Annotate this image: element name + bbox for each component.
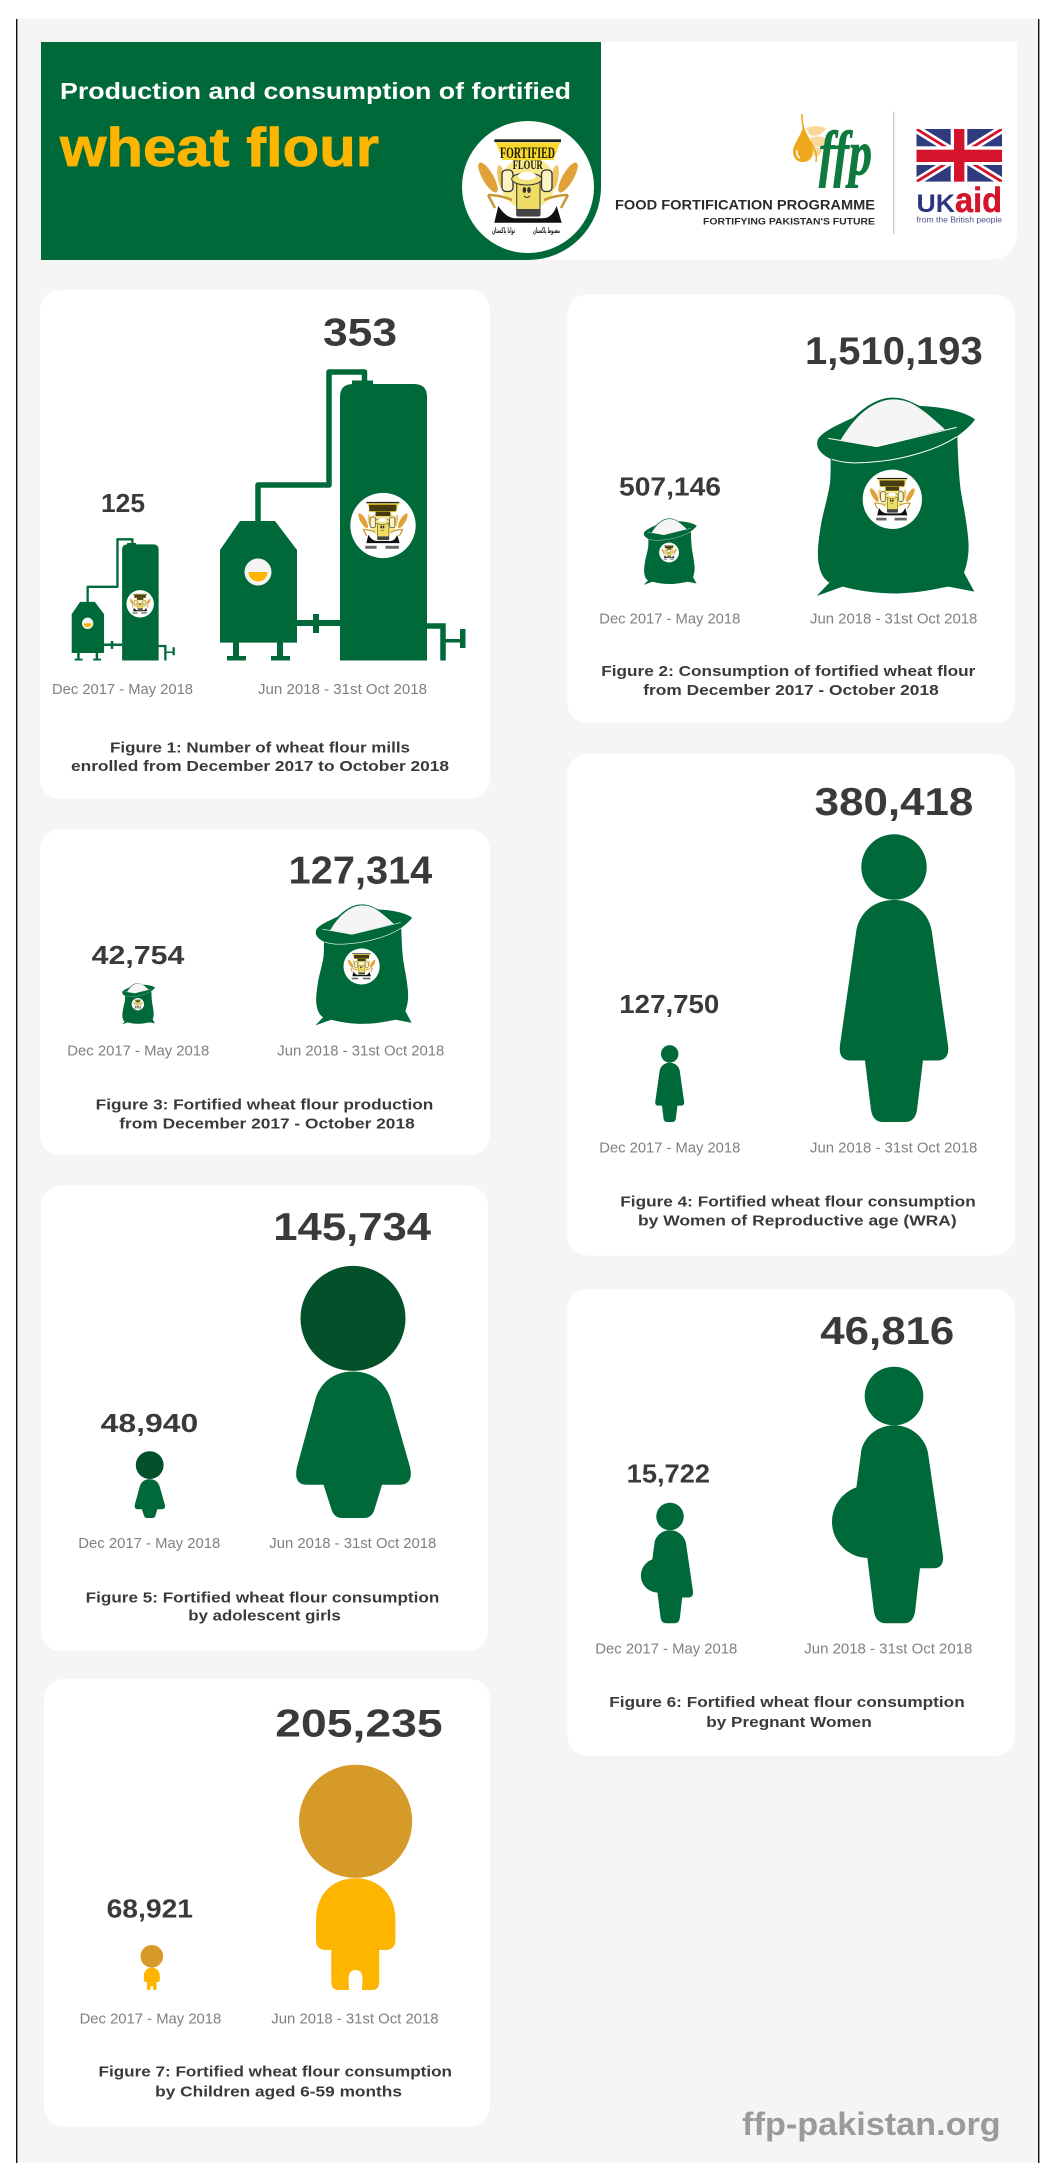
programme name: FOOD FORTIFICATION PROGRAMME xyxy=(615,197,875,212)
panel: figure 7 children xyxy=(44,1679,490,2127)
icon: small flour sack xyxy=(644,518,697,585)
value 68,921: 68,921 xyxy=(107,1894,193,1924)
icon: small flour sack xyxy=(122,983,155,1024)
period label right: Jun 2018 - 31st Oct 2018 xyxy=(258,682,427,698)
card xyxy=(567,1289,1015,1756)
period label right: Jun 2018 - 31st Oct 2018 xyxy=(277,1044,444,1060)
icon: union flag xyxy=(916,129,1002,182)
icon: fortified flour logo: توانا پاکستان xyxy=(492,226,515,235)
caption: by Children aged 6-59 months xyxy=(155,2084,402,2101)
UKaid wordmark xyxy=(916,181,1002,220)
period label left: Dec 2017 - May 2018 xyxy=(599,1140,740,1156)
card xyxy=(44,1679,490,2127)
panel: figure 2 consumption xyxy=(567,294,1015,723)
value 46,816: 46,816 xyxy=(820,1310,954,1353)
caption xyxy=(96,1097,433,1133)
card xyxy=(567,754,1015,1256)
icon: small mill xyxy=(72,539,175,660)
icon: small pregnant woman xyxy=(641,1503,693,1623)
UKaid wordmark: aid xyxy=(955,181,1002,220)
icon: small child xyxy=(140,1945,163,1990)
value 1,510,193: 1,510,193 xyxy=(805,330,983,373)
icon: small girl xyxy=(135,1451,165,1518)
caption: Figure 2: Consumption of fortified wheat flour xyxy=(601,663,975,680)
caption xyxy=(86,1589,439,1624)
icon: large woman xyxy=(840,834,948,1122)
value 48,940: 48,940 xyxy=(101,1408,198,1438)
header green block xyxy=(41,42,601,260)
caption: Figure 6: Fortified wheat flour consumption xyxy=(609,1694,965,1711)
period label left: Dec 2017 - May 2018 xyxy=(78,1536,220,1552)
panel: figure 1 mills xyxy=(40,290,490,799)
caption: by adolescent girls xyxy=(188,1607,341,1624)
period label left: Dec 2017 - May 2018 xyxy=(595,1641,737,1657)
value 205,235: 205,235 xyxy=(275,1703,443,1746)
value 507,146: 507,146 xyxy=(619,472,721,502)
value 127,750: 127,750 xyxy=(619,989,719,1019)
card xyxy=(40,290,490,799)
period label left: Dec 2017 - May 2018 xyxy=(599,611,740,627)
period label left: Dec 2017 - May 2018 xyxy=(52,682,193,698)
value 353: 353 xyxy=(323,311,397,354)
caption xyxy=(601,663,975,699)
caption: enrolled from December 2017 to October 2018 xyxy=(71,758,449,775)
title line one: Production and consumption of fortified xyxy=(60,78,571,104)
period label right: Jun 2018 - 31st Oct 2018 xyxy=(269,1536,436,1552)
icon: large child xyxy=(299,1765,412,1990)
panel: header banner xyxy=(41,42,1017,260)
icon: fortified flour logo xyxy=(462,121,594,253)
card xyxy=(41,1186,488,1651)
period label right: Jun 2018 - 31st Oct 2018 xyxy=(810,1140,977,1156)
caption: Figure 5: Fortified wheat flour consumption xyxy=(86,1589,439,1606)
icon: fortified flour logo: FLOUR xyxy=(513,158,543,172)
panel: figure 5 adolescent girls xyxy=(41,1186,488,1651)
header white background xyxy=(41,42,1017,260)
period label left: Dec 2017 - May 2018 xyxy=(80,2011,221,2027)
period label right: Jun 2018 - 31st Oct 2018 xyxy=(810,611,977,627)
panel: figure 4 women of reproductive age xyxy=(567,754,1015,1256)
icon: ffp oil drop and wheat xyxy=(793,114,828,162)
caption: by Women of Reproductive age (WRA) xyxy=(638,1212,957,1230)
website address: ffp-pakistan.org xyxy=(742,2106,1001,2142)
caption: from December 2017 - October 2018 xyxy=(119,1116,415,1133)
value 145,734: 145,734 xyxy=(273,1206,431,1249)
title line two: wheat flour xyxy=(59,116,379,178)
icon: fortified flour logo: مضبوط پاکستان xyxy=(533,226,560,235)
icon: large mill xyxy=(220,372,466,660)
icon: small woman xyxy=(655,1045,684,1122)
ffp wordmark: ffp xyxy=(819,120,872,188)
caption xyxy=(71,739,449,775)
icon: large girl xyxy=(296,1266,411,1518)
caption: by Pregnant Women xyxy=(706,1714,872,1731)
icon: large pregnant woman xyxy=(832,1367,943,1623)
panel: figure 6 pregnant women xyxy=(567,1289,1015,1756)
icon: large flour sack xyxy=(315,904,412,1025)
panel: figure 3 production xyxy=(40,830,490,1155)
UKaid strapline: from the British people xyxy=(916,215,1002,225)
UKaid wordmark: UK xyxy=(916,190,955,218)
period label right: Jun 2018 - 31st Oct 2018 xyxy=(804,1641,972,1657)
programme strapline: FORTIFYING PAKISTAN'S FUTURE xyxy=(703,217,875,228)
icon: large flour sack xyxy=(817,398,975,596)
value 127,314: 127,314 xyxy=(289,850,433,893)
caption: Figure 1: Number of wheat flour mills xyxy=(110,739,410,756)
period label left: Dec 2017 - May 2018 xyxy=(67,1044,209,1060)
caption xyxy=(609,1694,965,1731)
value 42,754: 42,754 xyxy=(92,940,185,970)
caption: Figure 3: Fortified wheat flour production xyxy=(96,1097,433,1114)
caption: Figure 4: Fortified wheat flour consumption xyxy=(620,1194,976,1210)
card xyxy=(567,294,1015,723)
caption xyxy=(620,1194,976,1230)
value 380,418: 380,418 xyxy=(815,781,973,824)
caption: Figure 7: Fortified wheat flour consumption xyxy=(98,2064,452,2081)
card xyxy=(40,830,490,1155)
logo divider xyxy=(893,112,894,234)
value 125: 125 xyxy=(101,488,145,518)
icon: fortified flour logo: FORTIFIED xyxy=(500,145,555,162)
caption xyxy=(98,2064,452,2101)
period label right: Jun 2018 - 31st Oct 2018 xyxy=(271,2011,439,2027)
value 15,722: 15,722 xyxy=(627,1459,710,1489)
caption: from December 2017 - October 2018 xyxy=(643,682,939,699)
